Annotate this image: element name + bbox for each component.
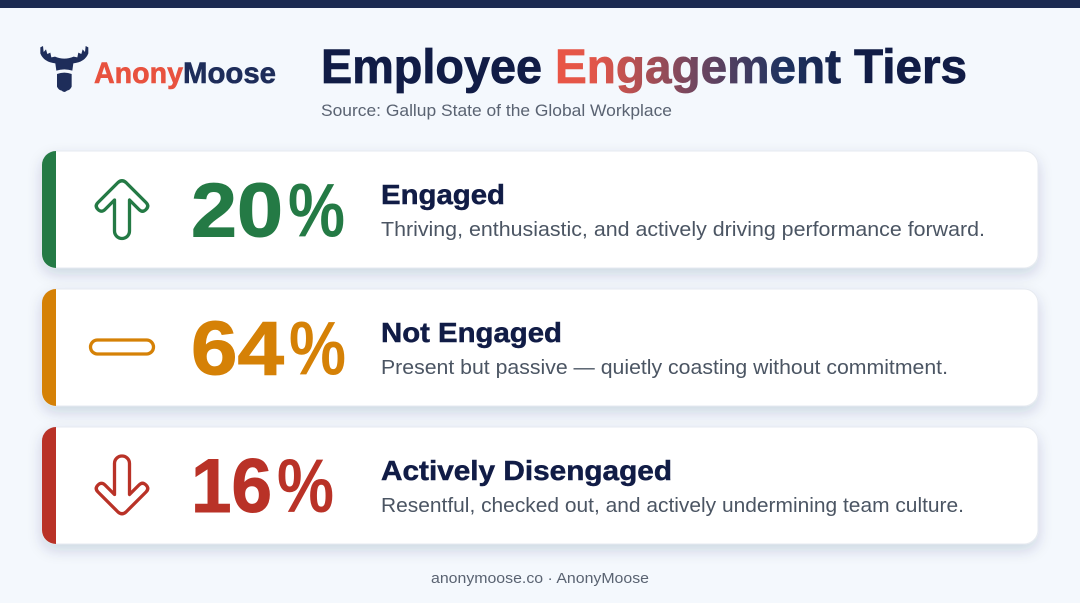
label: Actively Disengaged: Actively Disengaged: [381, 455, 672, 486]
title: [321, 41, 967, 94]
description: Resentful, checked out, and actively undermining team culture.: [381, 494, 964, 517]
stat: 64%: %: [289, 306, 346, 392]
stat: 64%: 64: [191, 306, 284, 392]
stat: 20%: %: [288, 168, 345, 254]
icon: dash: [90, 340, 154, 354]
icon: down arrow: [96, 456, 148, 514]
stat: 64%: [191, 306, 346, 392]
label: Not Engaged: Not Engaged: [381, 317, 562, 348]
accent bar: green: [42, 151, 56, 268]
title: Engagement: [555, 41, 841, 94]
stat: 20%: 20: [191, 168, 283, 254]
logo wordmark: Anony: [94, 57, 183, 90]
panel: Actively Disengaged: [42, 427, 1038, 544]
logo: AnonyMoose: [40, 46, 276, 92]
icon: up arrow: [96, 181, 148, 239]
stat: 16%: [191, 444, 334, 529]
stat: 20%: [191, 168, 345, 254]
panel: Engaged: [42, 151, 1038, 268]
source line: Source: Gallup State of the Global Workplace: [321, 101, 672, 120]
top navy bar: [0, 0, 1080, 8]
stat: 16%: 16: [191, 444, 272, 529]
stat: 16%: %: [277, 444, 334, 529]
panel: Not Engaged: [42, 289, 1038, 406]
accent bar: amber: [42, 289, 56, 406]
logo wordmark: Moose: [183, 57, 276, 90]
title: Employee: [321, 41, 542, 94]
logo wordmark: [94, 57, 276, 90]
label: Engaged: Engaged: [381, 179, 505, 210]
description: Thriving, enthusiastic, and actively driving performance forward.: [381, 218, 985, 241]
accent bar: red: [42, 427, 56, 544]
icon: moose head: [40, 46, 88, 92]
footer: anonymoose.co · AnonyMoose: [431, 570, 649, 587]
title: Tiers: [854, 41, 967, 94]
description: Present but passive — quietly coasting without commitment.: [381, 356, 948, 379]
